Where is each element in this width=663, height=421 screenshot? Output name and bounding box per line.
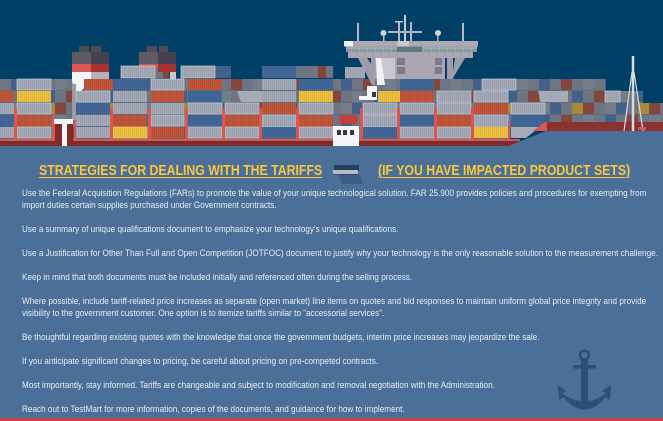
front containers (0, 66, 620, 138)
text: line items paragraph: Where possible, include tariff-related price increases as separate (open market) line items on quotes and bid responses to maintain uniform global price integrity and provide (22, 296, 646, 306)
heading: impacted product sets: (IF YOU HAVE IMPACTED PRODUCT SETS) (378, 162, 630, 179)
funnel: aft (72, 46, 109, 120)
text: FAR paragraph: Use the Federal Acquisition Regulations (FARs) to promote the value of your unique technological solution. FAR 25.900 provides policies and procedures for exempting from (22, 188, 646, 198)
text: line items paragraph (22, 296, 646, 318)
red tank and cabin (333, 86, 377, 146)
sky (0, 0, 663, 146)
heading: strategies: STRATEGIES FOR DEALING WITH THE TARIFFS (39, 162, 322, 179)
ship deck (0, 120, 520, 146)
text: FAR paragraph (22, 188, 646, 210)
icon: anchor (558, 350, 611, 410)
text: summary paragraph: Use a summary of unique qualifications document to emphasize your technology’s unique qualifications. (22, 224, 398, 234)
text: JOTFOC paragraph: Use a Justification for Other Than Full and Open Competition (JOTFOC) document to justify why your technology is the only reasonable solution to the measurement challenge. (22, 248, 658, 258)
funnel: forward (139, 46, 176, 79)
text: existing quotes paragraph: Be thoughtful regarding existing quotes with the knowledge that once the government budgets, interim price increases may jeopardize the sale. (22, 332, 540, 342)
mast (624, 56, 646, 131)
hull bow (508, 122, 663, 146)
text: contact paragraph: Reach out to TestMart for more information, copies of the documents, and guidance for how to implement. (22, 404, 405, 414)
text: FAR paragraph: import duties certain supplies purchased under Government contracts. (22, 200, 277, 210)
text: line items paragraph: visibility to the government customer. One option is to itemize tariffs similar to “accessorial services”. (22, 308, 384, 318)
bridge superstructure (344, 15, 478, 85)
white bow tower (54, 119, 73, 146)
icon: small container (333, 165, 363, 184)
text: pricing paragraph: If you anticipate significant changes to pricing, be careful about pricing on pre-competed contracts. (22, 356, 378, 366)
background container stacks (0, 66, 663, 139)
deck posts and rail (14, 108, 510, 146)
text: stay informed paragraph: Most importantly, stay informed. Tariffs are changeable and subject to modification and removal negotiation with the Administration. (22, 380, 495, 390)
bottom bar (0, 418, 663, 421)
text: documents paragraph: Keep in mind that both documents must be included initially and referenced often during the selling process. (22, 272, 412, 282)
